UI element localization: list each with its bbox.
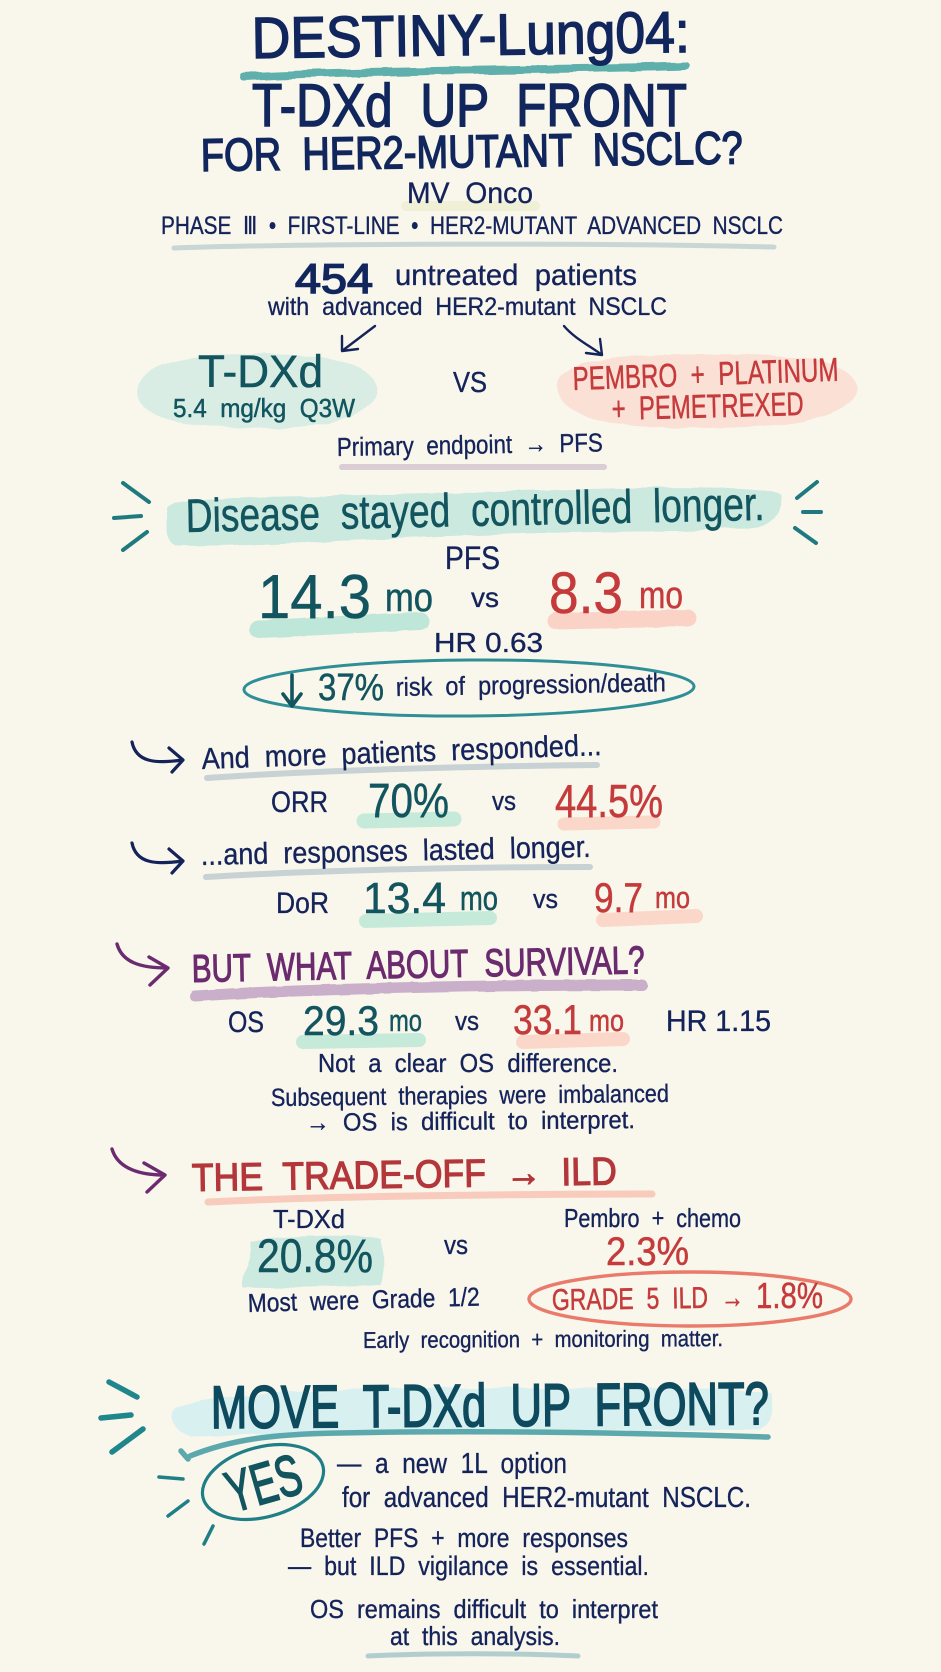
ORR comparison: vs [492,786,516,816]
OS interpretation [271,1048,669,1137]
closing underline [368,1654,578,1656]
patient population: 454 [295,255,373,302]
OS comparison: 33.1 [513,996,582,1043]
underline sweep [181,1432,768,1459]
callout: 37% risk reduction [244,658,694,718]
callout: grade 5 ILD: 1.8% [756,1275,823,1316]
conclusion text: OS remains difficult to interpret [310,1594,659,1624]
OS comparison: OS [228,1006,264,1039]
patient population: with advanced HER2-mutant NSCLC [267,293,667,321]
study subtitle [161,212,783,248]
patient population: untreated patients [395,259,637,292]
PFS comparison: mo [385,576,433,620]
conclusion text: — a new 1L option [337,1448,567,1480]
arrow: survival [117,944,168,985]
title line 3: FOR HER2-MUTANT NSCLC? [200,121,743,181]
heading: survival [191,939,645,996]
PFS comparison: 8.3 [549,561,623,626]
PFS comparison: mo [639,575,683,617]
title line 1: DESTINY-Lung04: [251,0,690,71]
icon: conclusion burst [101,1382,143,1452]
title block [200,0,743,181]
arm: T-DXd: 5.4 mg/kg Q3W [173,393,355,423]
arrow: to T-DXd [342,326,375,351]
OS comparison: mo [589,1003,624,1038]
patient population [267,255,667,321]
OS comparison: mo [389,1003,422,1038]
OS interpretation: Subsequent therapies were imbalanced [271,1080,669,1112]
ORR comparison [271,775,663,828]
arm: pembro + chemo: PEMBRO + PLATINUM [572,351,839,397]
conclusion text: at this analysis. [390,1621,560,1651]
title underline [244,66,686,77]
PFS comparison: vs [471,582,499,613]
icon: YES burst [159,1477,213,1544]
ILD: Pembro + chemo: 2.3% [606,1230,689,1274]
conclusion text: Better PFS + more responses [300,1523,628,1553]
callout: 37% risk reduction: risk of progression/death [396,667,666,702]
hazard ratio: HR 0.63 [434,627,543,658]
arm: T-DXd [137,346,376,428]
arrow: more patients responded [132,742,183,772]
PFS comparison [258,561,688,632]
DoR comparison: DoR [276,887,329,920]
DoR comparison: mo [460,880,498,918]
icon: right burst [795,482,821,543]
DoR comparison: vs [533,884,558,914]
conclusion text: for advanced HER2-mutant NSCLC. [342,1482,751,1514]
icon: left burst [114,483,149,550]
conclusion text: — but ILD vigilance is essential. [288,1551,649,1581]
PFS comparison: 14.3 [258,563,371,632]
heading: move T-DXd up front [173,1370,773,1459]
arm: T-DXd: T-DXd [198,346,323,397]
arm: pembro + chemo [558,351,856,428]
arrow: responses lasted [132,843,183,873]
study subtitle: PHASE Ⅲ • FIRST-LINE • HER2-MUTANT ADVANCED NSCLC [161,212,783,240]
title line 2: T-DXd UP FRONT [252,72,687,139]
callout: YES: YES [218,1442,309,1525]
callout: YES [194,1432,332,1532]
OS comparison: vs [455,1006,479,1036]
ILD: T-DXd [241,1204,480,1318]
callout: grade 5 ILD [529,1272,851,1326]
versus label: vs [444,1230,468,1260]
arrow: to chemo arm [564,326,602,355]
monitoring note: Early recognition + monitoring matter. [363,1325,723,1353]
ILD: Pembro + chemo [529,1203,851,1326]
ILD: T-DXd: Most were Grade 1/2 [247,1282,480,1318]
OS interpretation: Not a clear OS difference. [318,1048,618,1078]
OS comparison: 29.3 [303,997,379,1044]
conclusion text [288,1448,751,1651]
OS comparison [228,996,771,1044]
ILD: T-DXd: 20.8% [257,1229,373,1282]
versus label: VS [453,367,487,399]
DoR comparison: 9.7 [594,874,643,921]
ORR comparison: 44.5% [555,775,663,827]
DoR comparison: 13.4 [363,874,446,923]
heading: more responded: And more patients responded... [201,729,602,776]
DoR comparison: mo [655,880,690,915]
ILD: T-DXd: T-DXd [273,1204,345,1234]
arrow: trade-off [112,1149,165,1192]
OS interpretation: → OS is difficult to interpret. [306,1106,635,1137]
arm: pembro + chemo: + PEMETREXED [611,385,804,427]
author: MV Onco: MV Onco [407,177,533,210]
primary endpoint: Primary endpoint → PFS [337,427,603,462]
ILD: Pembro + chemo: Pembro + chemo [564,1203,741,1233]
OS comparison: HR 1.15 [666,1005,771,1038]
callout: 37% risk reduction: 37% [318,667,384,709]
callout: grade 5 ILD: GRADE 5 ILD → [552,1281,744,1317]
ORR comparison: ORR [271,786,328,819]
PFS label: PFS [445,540,500,576]
ORR comparison: 70% [368,775,449,828]
heading: disease controlled: Disease stayed controlled longer. [185,477,765,542]
heading: trade-off: THE TRADE-OFF → ILD [191,1150,617,1200]
DoR comparison [276,874,696,923]
heading: survival: BUT WHAT ABOUT SURVIVAL? [191,939,645,991]
heading: responses lasted longer: ...and responses lasted longer. [200,831,591,872]
